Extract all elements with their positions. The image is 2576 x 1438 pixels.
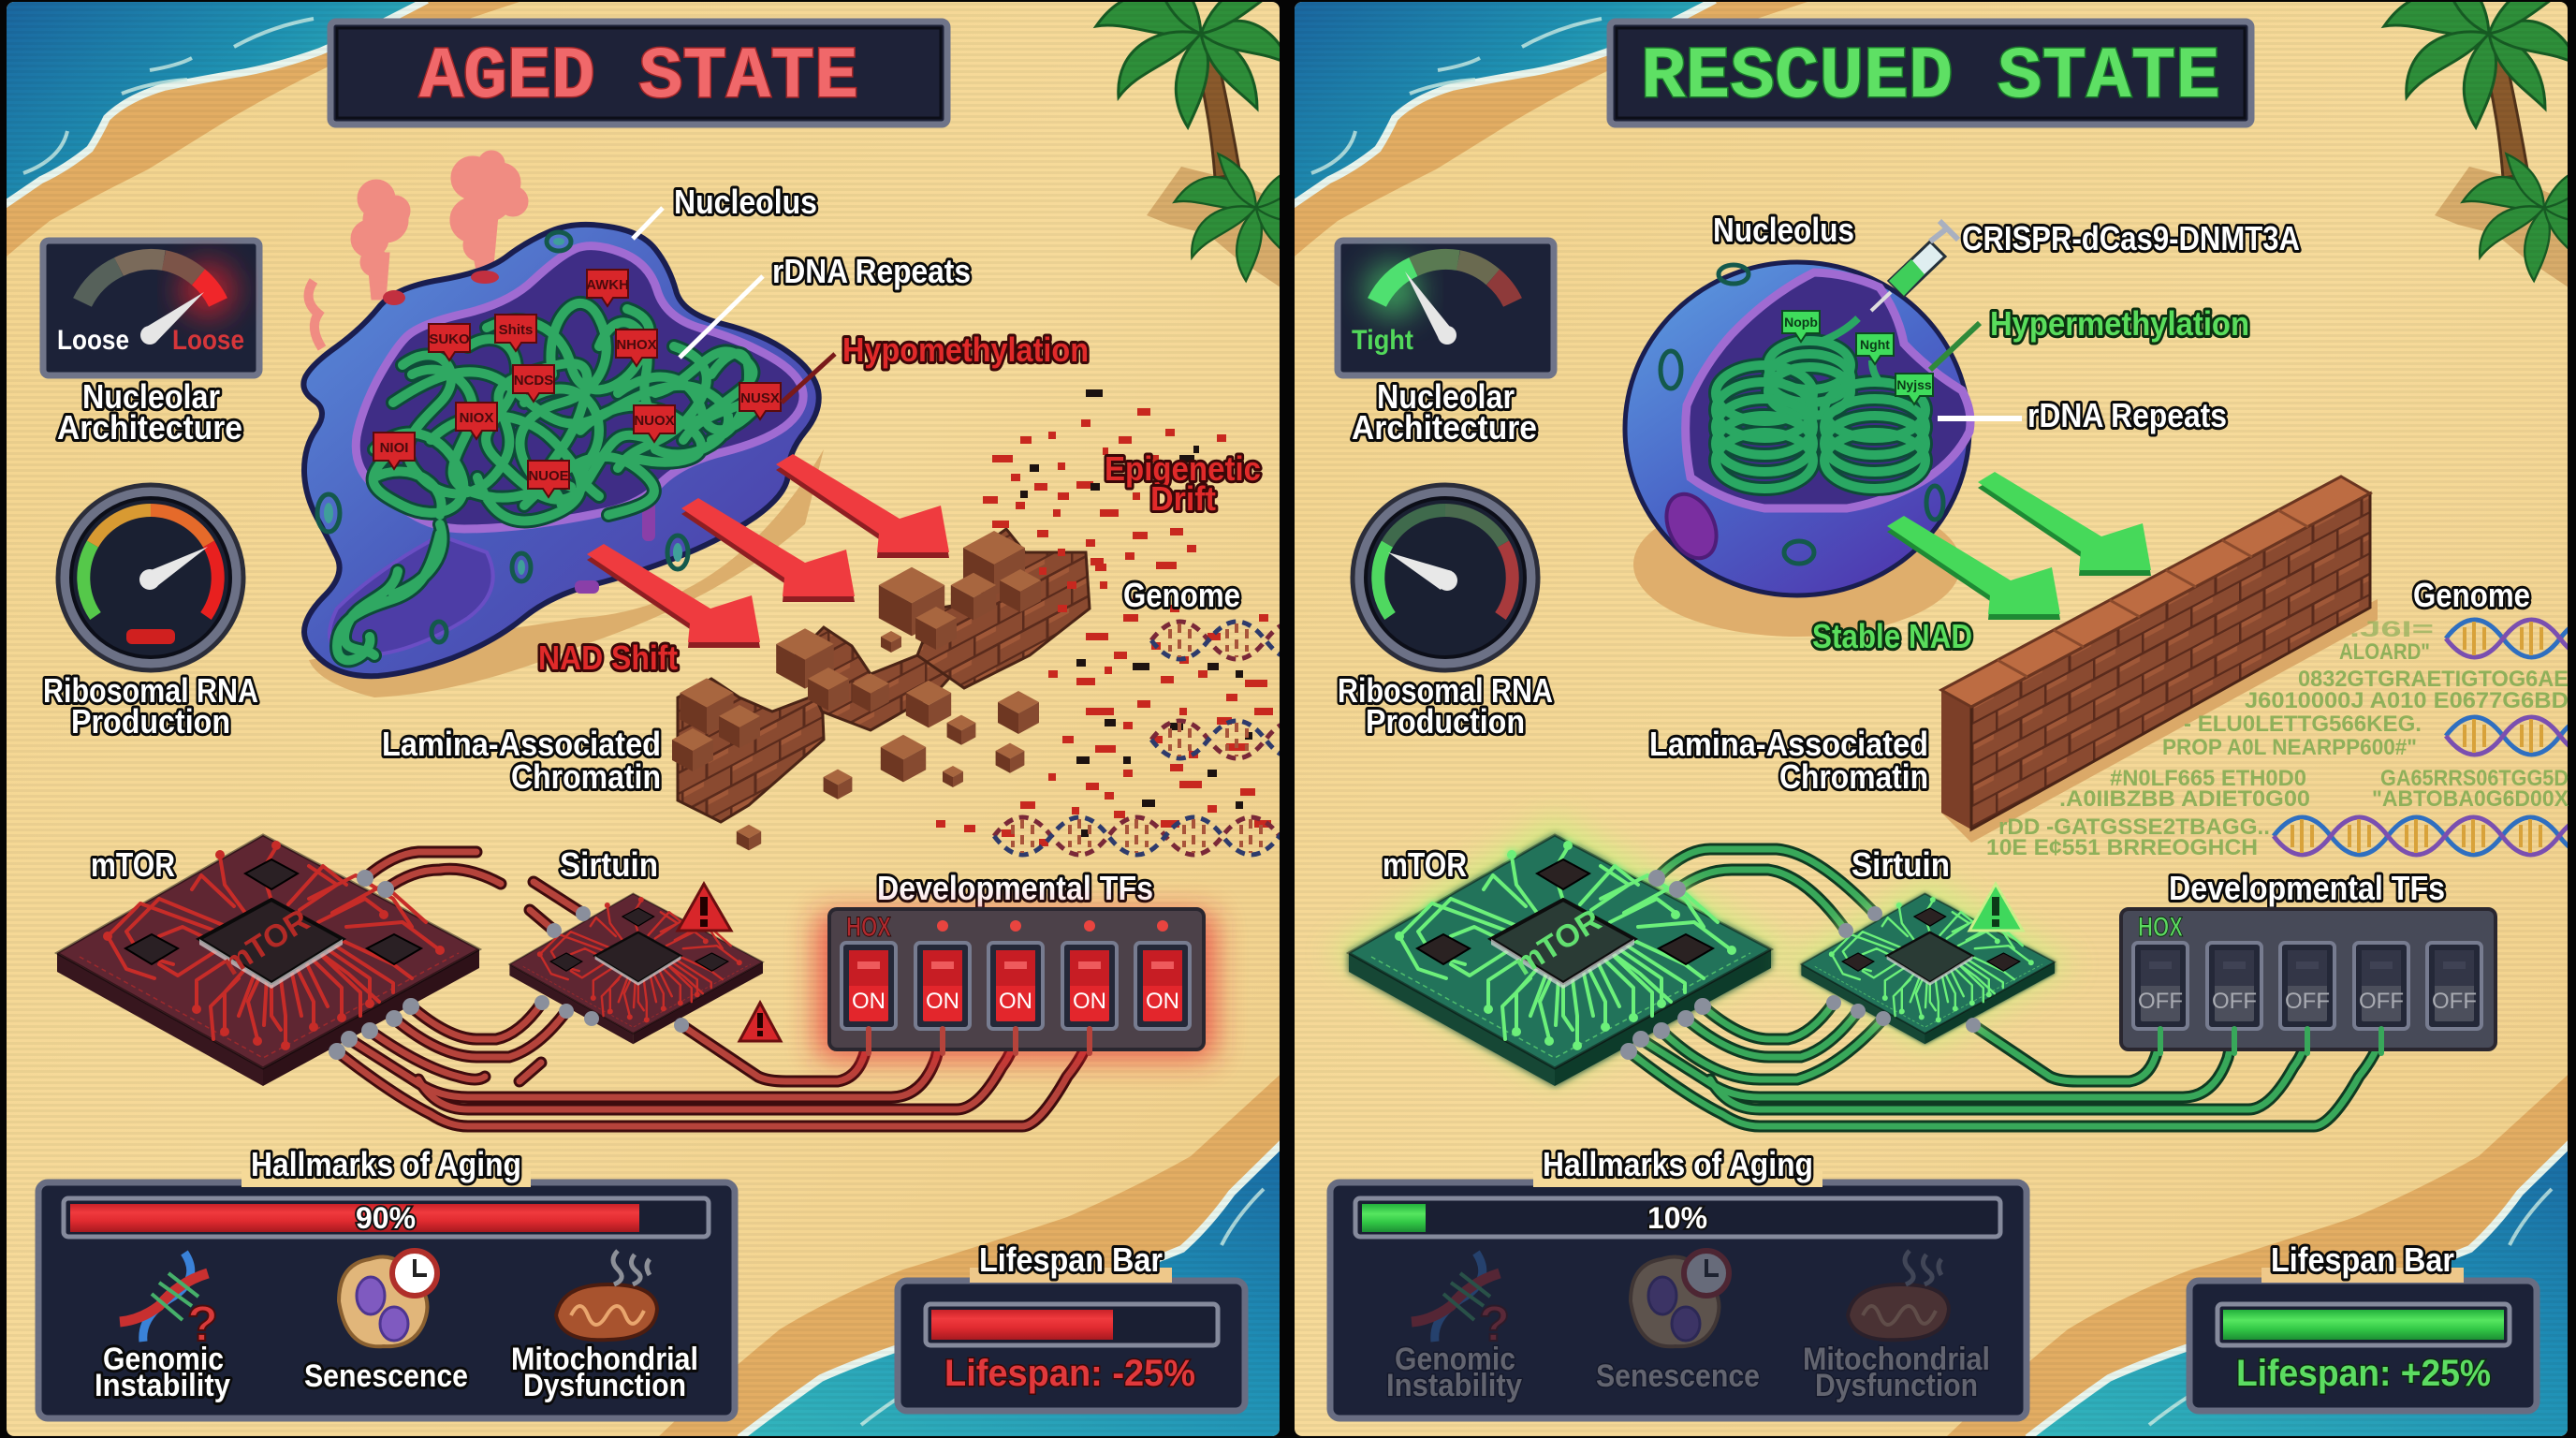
callouts: nucleolus, rDNA, hypomethylation: rDNA Repeats bbox=[772, 252, 971, 290]
switch panel: HOX off: OFF bbox=[2359, 989, 2404, 1014]
smoke plumes bbox=[309, 151, 528, 348]
genome code text: .A0IIBZBB ADIET0G00 bbox=[2059, 786, 2310, 812]
label: mitochondrial dysfunction: Mitochondrial bbox=[1803, 1342, 1990, 1377]
genome code text: 0832GTGRAETIGTOG6AE bbox=[2298, 667, 2569, 692]
label: nucleolar architecture bbox=[1352, 377, 1537, 447]
switch panel: HOX off: OFF bbox=[2138, 989, 2183, 1014]
label: ribosomal RNA production: Ribosomal RNA bbox=[1338, 671, 1553, 710]
label: nucleolar architecture bbox=[57, 377, 242, 447]
label: sirtuin: Sirtuin bbox=[560, 845, 658, 884]
nucleus blob with tangled rDNA: NUOX bbox=[634, 413, 675, 429]
callouts: nucleolus, CRISPR, hypermethylation, rDNA bbox=[1713, 211, 2300, 434]
nucleus with ordered rDNA coils bbox=[1625, 262, 1970, 637]
switch panel: HOX on: ON bbox=[852, 989, 886, 1014]
panel: hallmarks of aging bbox=[38, 1145, 735, 1418]
label: developmental TFs: Developmental TFs bbox=[877, 869, 1153, 907]
nucleus with ordered rDNA coils: Nopb bbox=[1784, 315, 1818, 330]
genome code text bbox=[1986, 617, 2569, 860]
label: lamina-associated chromatin: Chromatin bbox=[1779, 757, 1928, 796]
label: genomic instability: Genomic bbox=[1395, 1342, 1515, 1377]
label: lamina-associated chromatin bbox=[382, 725, 661, 796]
label: ribosomal RNA production: Ribosomal RNA bbox=[43, 671, 258, 710]
switch panel: HOX off: OFF bbox=[2432, 989, 2477, 1014]
label: nucleolar architecture: Architecture bbox=[1352, 408, 1537, 447]
genome code text: rDD -GATGSSE2TBAGG.. bbox=[1998, 814, 2270, 840]
nucleus with ordered rDNA coils: Nght bbox=[1860, 337, 1890, 352]
panel: aged state bbox=[7, 2, 1280, 1436]
callouts: nucleolus, CRISPR, hypermethylation, rDNA: rDNA Repeats bbox=[2027, 396, 2227, 434]
callouts: nucleolus, rDNA, hypomethylation bbox=[633, 183, 1089, 403]
switch panel: HOX on: ON bbox=[1146, 989, 1179, 1014]
gauge: nucleolar architecture tight: Tight bbox=[1352, 325, 1413, 356]
genome code text: .J6I= bbox=[2349, 617, 2434, 642]
label: nucleolar architecture: Nucleolar bbox=[1377, 377, 1515, 416]
label: mitochondrial dysfunction: Dysfunction bbox=[1815, 1368, 1978, 1403]
chip: mTOR healthy: mTOR bbox=[1508, 902, 1607, 983]
callouts: nucleolus, CRISPR, hypermethylation, rDNA: Hypermethylation bbox=[1990, 304, 2249, 343]
label: stable NAD: Stable NAD bbox=[1812, 617, 1972, 655]
progress bar: 10%: 10% bbox=[1647, 1201, 1707, 1235]
epigenetic drift label bbox=[1105, 449, 1261, 518]
progress bar: 10% bbox=[1355, 1198, 2000, 1237]
epigenetic drift label: Drift bbox=[1150, 479, 1216, 518]
label: lifespan title: Lifespan Bar bbox=[2271, 1240, 2454, 1279]
label: senescence: Senescence bbox=[304, 1358, 468, 1394]
genome code text: #N0LF665 ETH0D0 bbox=[2110, 766, 2306, 791]
label: mitochondrial dysfunction: Dysfunction bbox=[523, 1368, 686, 1403]
switch panel: HOX on: ON bbox=[926, 989, 959, 1014]
callouts: nucleolus, CRISPR, hypermethylation, rDNA: Nucleolus bbox=[1713, 211, 1854, 249]
label: genomic instability: Instability bbox=[1386, 1368, 1522, 1403]
icons: hallmarks faded bbox=[1412, 1251, 1949, 1352]
label: mitochondrial dysfunction: Mitochondrial bbox=[511, 1342, 698, 1377]
label: lamina-associated chromatin bbox=[1649, 725, 1928, 796]
chip: sirtuin damaged bbox=[509, 893, 763, 1044]
gauge: nucleolar architecture loose: Loose bbox=[57, 325, 129, 356]
lifespan meter bbox=[2217, 1304, 2510, 1345]
label: hallmarks title: Hallmarks of Aging bbox=[251, 1145, 521, 1183]
label: genomic instability: Instability bbox=[95, 1368, 230, 1403]
beach background: aged bbox=[0, 0, 1326, 1438]
label: genome: Genome bbox=[2413, 576, 2530, 614]
nucleus blob with tangled rDNA: SUKO bbox=[429, 331, 470, 347]
gauge: nucleolar architecture tight bbox=[1338, 241, 1554, 375]
gauge: nucleolar architecture loose bbox=[43, 241, 259, 375]
arrows: stable NAD green bbox=[1887, 472, 2151, 620]
panel: lifespan bar bbox=[2189, 1240, 2537, 1411]
label: hallmarks title: Hallmarks of Aging bbox=[1543, 1145, 1813, 1183]
panel: lifespan bar bbox=[898, 1240, 1245, 1411]
value: lifespan -25%: Lifespan: -25% bbox=[944, 1353, 1195, 1394]
label: mTOR: mTOR bbox=[91, 845, 175, 884]
label: NAD shift: NAD Shift bbox=[538, 638, 678, 677]
label: genome: Genome bbox=[1123, 576, 1240, 614]
title banner: rescued state: RESCUED STATE bbox=[1641, 37, 2220, 119]
nucleus blob with tangled rDNA: NUSX bbox=[740, 390, 780, 406]
switch panel: HOX off: OFF bbox=[2285, 989, 2330, 1014]
nucleus blob with tangled rDNA: NHOX bbox=[616, 337, 657, 353]
label: lamina-associated chromatin: Lamina-Associated bbox=[382, 725, 661, 763]
wires: rescued bbox=[1629, 849, 2381, 1126]
nucleus blob with tangled rDNA: NCDS bbox=[514, 373, 553, 389]
icons: hallmarks bbox=[120, 1251, 657, 1352]
intact DNA helices bbox=[2274, 620, 2576, 855]
label: ribosomal RNA production: Production bbox=[71, 702, 230, 741]
gauge: nucleolar architecture loose: Loose bbox=[172, 325, 244, 356]
nucleus blob with tangled rDNA: NUOE bbox=[528, 468, 569, 484]
nucleus with ordered rDNA coils: Nyjss bbox=[1896, 377, 1932, 392]
nucleus blob with tangled rDNA: Shits bbox=[499, 322, 533, 338]
label: sirtuin: Sirtuin bbox=[1852, 845, 1950, 884]
broken DNA helices bbox=[994, 622, 1494, 855]
genome code text: J6010000J A010 E0677G6BD bbox=[2245, 688, 2569, 713]
warning triangles bbox=[678, 884, 781, 1041]
label: lamina-associated chromatin: Lamina-Associated bbox=[1649, 725, 1928, 763]
progress bar: 90%: 90% bbox=[356, 1201, 416, 1235]
broken brick wall bbox=[672, 529, 1090, 850]
switch panel: HOX on bbox=[816, 909, 1215, 1059]
label: lifespan title: Lifespan Bar bbox=[979, 1240, 1163, 1279]
speedometer: ribosomal RNA production normal bbox=[1353, 485, 1538, 670]
nucleus blob with tangled rDNA bbox=[303, 225, 824, 697]
nucleus blob with tangled rDNA: NIOX bbox=[460, 410, 493, 426]
nucleus blob with tangled rDNA: AWKH bbox=[586, 277, 629, 293]
epigenetic drift label: Epigenetic bbox=[1105, 449, 1261, 488]
nucleus blob with tangled rDNA: NIOI bbox=[380, 440, 408, 456]
chip: mTOR healthy bbox=[1329, 816, 1793, 1086]
label: ribosomal RNA production: Production bbox=[1366, 702, 1525, 741]
syringe: CRISPR-dCas9-DNMT3A bbox=[1871, 221, 1958, 311]
label: ribosomal RNA production bbox=[1338, 671, 1553, 741]
label: mitochondrial dysfunction bbox=[511, 1342, 698, 1403]
progress bar: 90% bbox=[64, 1198, 709, 1237]
switch panel: HOX off: OFF bbox=[2212, 989, 2257, 1014]
value: lifespan +25%: Lifespan: +25% bbox=[2236, 1353, 2491, 1394]
label: lamina-associated chromatin: Chromatin bbox=[511, 757, 661, 796]
panel: rescued state bbox=[1288, 0, 2576, 1438]
panel: hallmarks of aging bbox=[1330, 1145, 2027, 1418]
label: ribosomal RNA production bbox=[43, 671, 258, 741]
label: nucleolar architecture: Architecture bbox=[57, 408, 242, 447]
chip: mTOR damaged: mTOR bbox=[216, 902, 315, 983]
label: genomic instability bbox=[95, 1342, 230, 1403]
title banner: aged state bbox=[330, 22, 947, 125]
genome code text: "ABTOBA0G6D00X bbox=[2372, 786, 2569, 812]
callouts: nucleolus, rDNA, hypomethylation: Hypomethylation bbox=[842, 330, 1089, 369]
genome code text: - ELU0LETTG566KEG. bbox=[2184, 712, 2422, 737]
label: genomic instability: Genomic bbox=[103, 1342, 224, 1377]
label: nucleolar architecture: Nucleolar bbox=[82, 377, 220, 416]
wires: aged bbox=[337, 852, 1090, 1126]
switch panel: HOX on: ON bbox=[999, 989, 1032, 1014]
switch panel: HOX on: HOX bbox=[846, 912, 891, 943]
label: senescence: Senescence bbox=[1596, 1358, 1760, 1394]
genome code text: ALOARD" bbox=[2339, 639, 2430, 665]
label: developmental TFs: Developmental TFs bbox=[2169, 869, 2445, 907]
label: genomic instability bbox=[1386, 1342, 1522, 1403]
arrows: NAD shift red bbox=[587, 454, 949, 648]
epigenetic drift scatter bbox=[936, 393, 1273, 843]
chip: mTOR damaged bbox=[57, 835, 479, 1086]
switch panel: HOX off bbox=[2121, 909, 2496, 1053]
genome code text: PROP A0L NEARPP600#" bbox=[2162, 735, 2417, 760]
switch panel: HOX off: HOX bbox=[2138, 912, 2183, 943]
warning triangle green bbox=[1969, 884, 2023, 931]
callouts: nucleolus, rDNA, hypomethylation: Nucleolus bbox=[674, 183, 817, 221]
genome code text: 10E E¢551 BRREOGHCH bbox=[1986, 835, 2258, 860]
switch panel: HOX on: ON bbox=[1073, 989, 1106, 1014]
beach background: rescued bbox=[1288, 0, 2576, 1438]
label: mTOR: mTOR bbox=[1383, 845, 1467, 884]
callouts: nucleolus, CRISPR, hypermethylation, rDNA: CRISPR-dCas9-DNMT3A bbox=[1962, 219, 2300, 257]
title banner: aged state: AGED STATE bbox=[419, 37, 858, 119]
speedometer: ribosomal RNA production high bbox=[58, 485, 243, 670]
lifespan meter bbox=[926, 1304, 1218, 1345]
label: mitochondrial dysfunction bbox=[1803, 1342, 1990, 1403]
chip: sirtuin healthy bbox=[1782, 878, 2074, 1049]
intact brick wall bbox=[1941, 477, 2378, 843]
